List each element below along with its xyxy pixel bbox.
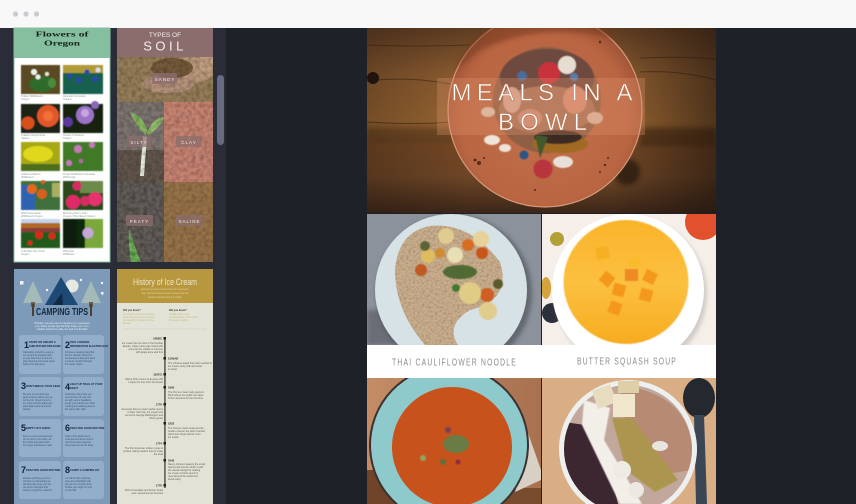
timeline notes: The Chinese adapt their own method of (168, 362, 212, 365)
tip body text: the cooler nights (65, 363, 83, 366)
white chocolate cubes (592, 381, 639, 417)
tip body text: Reflective rope helps you (65, 393, 93, 396)
flower captions (21, 95, 96, 256)
tip body text: on the trip. Check the tent, (23, 399, 51, 402)
tip numbers and titles: PICK A DESIGN (70, 340, 89, 344)
timeline dates: 1776 (156, 484, 162, 488)
flower captions: Oregon (21, 98, 30, 101)
timeline notes: America's first ice cream parlor opens (121, 408, 164, 411)
flower captions: Wild Honeysuckle (21, 212, 41, 215)
tip body text: at night, and a headlamp (65, 399, 92, 402)
tip numbers and titles: 5 (21, 423, 26, 433)
scrollbar thumb (217, 75, 224, 145)
tip body text: before the light goes (23, 363, 45, 366)
timeline notes: Marco Polo returns to Europe with (125, 378, 164, 381)
intro text: Whether you are new to camping or a seasoned (34, 321, 90, 325)
timeline notes: The first ice cream cafe opens in (168, 391, 205, 394)
timeline notes: ice cream (168, 436, 179, 439)
did you know columns: Europe (123, 322, 132, 325)
heading: Types of Soil (143, 32, 187, 54)
timeline dates: 1660 (168, 386, 175, 390)
flower captions: Cascade Iris Garden (63, 95, 87, 98)
tip numbers and titles (21, 340, 108, 475)
tip numbers and titles: START OR CREATE A (29, 340, 56, 344)
timeline notes: The first American written recipe is (125, 447, 164, 450)
tip body text: Practice pitching your tent (23, 477, 51, 480)
timeline dates (153, 336, 178, 488)
heading: Flowers of Oregon: Oregon (44, 38, 81, 48)
did you know columns: treat enjoyed only by royalty (123, 316, 155, 319)
tip body text: use them before leaving, (65, 441, 92, 444)
did you know columns: and wealthy families across (123, 319, 154, 322)
panel: History of Ice Cream (117, 269, 213, 504)
flower photo grid (21, 65, 103, 248)
tip body text: out at the campsite and (23, 486, 49, 489)
sidebar background (0, 28, 226, 504)
hero photo: plated dessert on wood (367, 28, 716, 213)
timeline notes: recipes for ices from his travels (129, 381, 164, 384)
timeline dates: 1832 (168, 422, 175, 426)
garnish (420, 427, 469, 465)
timeline notes: ice cream using milk and snow (168, 365, 202, 368)
timeline dates: 1776 (156, 402, 162, 406)
tip body text: trouble you might run into (65, 486, 93, 489)
flower captions: Tulip Bulb Farm Field (21, 250, 45, 253)
tip body text: set up and be located early (23, 354, 53, 357)
heading: Types of Soil: SOIL (143, 38, 187, 54)
tip numbers and titles: LIGHT UP TRAIL AT YOUR (70, 382, 103, 386)
tip body text: pack spare parts and tools (23, 405, 52, 408)
tip body text (23, 351, 96, 492)
header intro text: day, but how did ice cream come to be the (142, 292, 189, 295)
timeline notes: syrup for the nobility in summer (128, 348, 163, 351)
soil: sandy: SANDY (155, 77, 175, 82)
tip body text: the camp after dark (65, 408, 86, 411)
tip body text: keeps your hands free while (65, 402, 95, 405)
flower captions: Tualatin Oregon Rose (21, 134, 46, 137)
tip cards (19, 335, 104, 499)
photo: tomato soup (367, 365, 541, 504)
tip body text: Be sure to test all of your (23, 393, 50, 396)
flower captions: Oregon, Pink Flower Flowers (63, 215, 96, 218)
tip numbers and titles: SHELTER BEFORE DARK (29, 344, 61, 348)
soil: peaty (117, 182, 164, 262)
tip body text: at home so that setting up (23, 480, 51, 483)
heading: Meals in a Bowl: BOWL (498, 109, 587, 136)
timeline notes: Nancy Johnson patents the small (168, 463, 205, 466)
tip body text: always (23, 408, 31, 411)
heading: Flowers of Oregon: Flowers of (36, 30, 89, 38)
tip numbers and titles: EMPTY OUT CHEST (26, 426, 51, 430)
tip body text: do not open it too often, as (23, 438, 52, 441)
header intro text (141, 288, 189, 299)
soil: silty (117, 102, 164, 182)
soil: clay (164, 102, 213, 182)
flower captions: Blooming Peony Farm (63, 212, 88, 215)
tip numbers and titles: PRACTICE GOOD ROUTINE (26, 468, 61, 472)
did you know columns: popular flavor in the world (169, 316, 198, 319)
did you know columns: Ice cream was once a luxury (123, 313, 155, 316)
photo: smoothie bowl (542, 378, 716, 504)
heading: Flowers of Oregon (36, 30, 89, 48)
tip body text: a mat for comfort through (65, 360, 93, 363)
tip body text: Keep a cooler well iced and (23, 435, 53, 438)
timeline notes: in New York City. Ice cream was (127, 411, 164, 414)
caption: Butter Squash Soup: BUTTER SQUASH SOUP (577, 356, 677, 368)
timeline notes: used around the world and (168, 475, 198, 478)
tip body text: rope and a flashlight will (65, 480, 91, 483)
heading: Meals in a Bowl: MEALS IN A (452, 80, 632, 106)
tip body text: on the trail (65, 489, 77, 492)
intro text: outdoor adventure safe, fun and comfortable (36, 327, 88, 331)
tip numbers and titles: 4 (65, 382, 70, 392)
flower captions: Wildflowers Oregon (21, 215, 43, 218)
heading: History of Ice Cream: History of Ice Cream (133, 277, 197, 287)
tip body text: fits the climate, check the (65, 354, 93, 357)
timeline notes: ice cream at home and it is (168, 472, 199, 475)
tip body text: Campsites should be easy to (23, 351, 54, 354)
tip body text: since help can be far away (65, 444, 94, 447)
tip body text: see the lines of your tent (65, 396, 91, 399)
caption strip (367, 345, 716, 378)
flower captions: Oregon (63, 137, 72, 140)
timeline notes: Ice cream has its roots in the Persian (122, 342, 164, 345)
did you know columns (123, 309, 198, 325)
tip numbers and titles: 1 (24, 340, 29, 350)
panel: Camping Tips (14, 269, 110, 504)
did you know columns: Vanilla is the most (169, 313, 189, 316)
tip body text: safe firewood and clean water (23, 360, 55, 363)
tip body text: gear at home before you go (23, 396, 53, 399)
timeline notes: Paris where the public can taste (168, 394, 204, 397)
flower captions: Wild Gorge (63, 176, 76, 179)
header intro text: favorite dessert that it is today (148, 296, 182, 299)
soil: saline (164, 182, 213, 262)
flower captions: Cluster of Verbena (63, 134, 84, 137)
panel: Flowers of Oregon (14, 28, 110, 262)
soil: peaty: PEATY (130, 219, 149, 224)
tip body text: will feel easy once you are (23, 483, 52, 486)
dessert stack (481, 47, 603, 178)
timeline dates: 1774 (156, 442, 162, 446)
timeline notes: frozen desserts for the first time (168, 397, 204, 400)
timeline dates: 1300'S (153, 372, 162, 376)
timeline notes: loved today (168, 478, 182, 481)
intro text (34, 321, 90, 331)
tip numbers and titles: SIGHT (70, 386, 78, 390)
timeline notes: printed, telling readers how to make (123, 450, 164, 453)
timeline notes: Empire, where snow was mixed with (123, 345, 164, 348)
timeline notes (121, 342, 212, 495)
tip body text: the stove and the lights and (23, 402, 53, 405)
tip numbers and titles: 7 (21, 465, 26, 475)
photo: butter squash soup (542, 214, 716, 345)
timeline notes: hand-crank freezer which is still (168, 466, 203, 469)
browser title bar (0, 0, 856, 28)
tip numbers and titles: INFORMATION ELECTRIC BAG (70, 344, 108, 348)
tip body text: for longer and keeps it safe (23, 444, 53, 447)
flower captions: Wild Aster (63, 250, 74, 253)
flower captions: Garden (21, 137, 30, 140)
tip numbers and titles: CARRY A CAMPING KIT (70, 468, 100, 472)
did you know columns: by a wide margin (169, 319, 189, 322)
heading: Camping Tips: CAMPING TIPS (36, 307, 88, 318)
soil: saline: SALINE (178, 219, 201, 224)
tip body text: Choose a sleeping bag that (65, 351, 94, 354)
intro text: pro, these simple tips will help make your next (36, 324, 89, 328)
squash cubes (595, 246, 658, 316)
tip numbers and titles: 3 (21, 381, 26, 391)
spoon (683, 378, 715, 504)
tip body text: temperature rating and pack (65, 357, 96, 360)
did you know columns: Did you know? (123, 309, 141, 312)
tip body text: Pack a first aid kit and a (65, 435, 91, 438)
flower captions: Purple Wildflowers Columbia (63, 173, 96, 176)
tip body text: so you have time to look for (23, 357, 52, 360)
photo: Thai cauliflower noodle (367, 214, 541, 345)
flower captions: Wildflower (63, 253, 75, 256)
timeline notes: soon spread across America (131, 492, 164, 495)
flower captions: Oregon (63, 98, 72, 101)
camping illustration (20, 277, 104, 316)
tip body text: this helps food stay fresh (23, 441, 50, 444)
tip body text: ready to enjoy the outdoors (23, 489, 53, 492)
tip body text: multi-tool and know how to (65, 438, 94, 441)
timeline notes: the classic design for making (168, 469, 201, 472)
timeline notes: The first ice cream soda and the (168, 427, 204, 430)
soil: sandy (117, 57, 216, 102)
heading: Meals in a Bowl (453, 84, 632, 130)
timeline notes: served to George Washington and (125, 414, 164, 417)
tip numbers and titles: 8 (65, 465, 70, 475)
tip body text: cooking and walking around (65, 405, 95, 408)
timeline notes: which lets shops sell far more (168, 433, 201, 436)
heading: Types of Soil: TYPES OF (149, 32, 181, 39)
caption: Thai Cauliflower Noodle: THAI CAULIFLOWER NOODLE (392, 358, 517, 368)
timeline notes: other guests (149, 417, 164, 420)
tip numbers and titles: 2 (65, 340, 70, 350)
timeline notes: with grape juice and fruit (136, 351, 163, 354)
tip numbers and titles: PRACTICE GOOD ROUTINE (70, 426, 105, 430)
tip numbers and titles: DON'T BREAK YOUR GEAR (26, 384, 60, 388)
timeline dates: 1200AD (168, 356, 178, 360)
tip body text: get you out of most of the (65, 483, 93, 486)
timeline notes: modern freezer are both invented (168, 430, 206, 433)
soil: clay: CLAY (181, 140, 197, 145)
timeline notes: Word of sundaes and frozen treats (125, 489, 164, 492)
panel: Types of Soil (117, 28, 216, 262)
timeline (121, 336, 212, 495)
did you know columns: Did you know? (169, 309, 187, 312)
timeline notes: in winter (168, 368, 177, 371)
header intro text: Everyone loves a sweet treat on a summer (141, 288, 189, 291)
timeline dates: 500BC (153, 336, 162, 340)
flower captions: Goldenrod Bloom (21, 173, 40, 176)
timeline notes: the treat (154, 453, 163, 456)
tip body text: A small kit with matches, (65, 477, 91, 480)
flower captions: Wildflowers (21, 176, 35, 179)
timeline dates: 1843 (168, 458, 175, 462)
tip numbers and titles: 6 (65, 423, 70, 433)
flower captions: Oregon (21, 253, 30, 256)
flower captions: Trillium Wildflowers (21, 95, 43, 98)
translucent title band (437, 78, 645, 135)
soil: silty: SILTY (130, 140, 148, 145)
